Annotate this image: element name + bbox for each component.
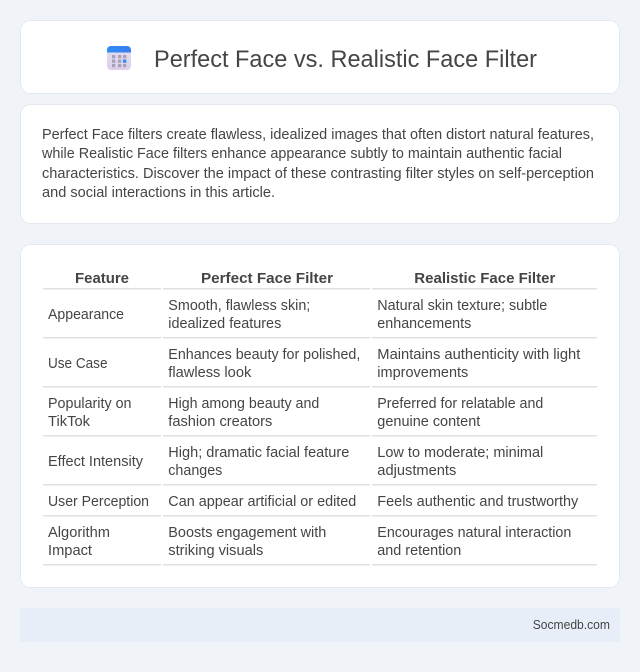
icon: calendar	[107, 46, 131, 70]
table row: algorithm impact: Boosts engagement with	[168, 525, 326, 541]
table header row: Feature	[75, 270, 129, 287]
title: Perfect Face vs. Realistic Face Filter	[154, 46, 537, 73]
text block: introduction paragraph: and social interactions in this article.	[42, 185, 275, 201]
table row: use case: flawless look	[168, 365, 252, 381]
table row: effect intensity: Low to moderate; minimal	[377, 445, 543, 461]
table header row: Realistic Face Filter	[414, 270, 555, 287]
table row: popularity on tiktok: Preferred for relatable and	[377, 396, 543, 412]
table row: algorithm impact: and retention	[377, 543, 461, 559]
table row: user perception: User Perception	[48, 494, 149, 510]
table header row	[75, 270, 555, 287]
table row: algorithm impact: striking visuals	[168, 543, 263, 559]
table row: effect intensity: adjustments	[377, 463, 456, 479]
table header row: Perfect Face Filter	[201, 270, 333, 287]
table row: effect intensity: changes	[168, 463, 222, 479]
table row: use case: Use Case	[48, 356, 108, 372]
table row: use case: Enhances beauty for polished,	[168, 347, 360, 363]
panel: introduction	[20, 104, 620, 224]
table row: use case	[48, 347, 580, 381]
text block: introduction paragraph: while Realistic Face filters enhance appearance subtly to maintain authentic facial	[41, 146, 562, 162]
panel: title card	[20, 20, 620, 94]
table row: use case: Maintains authenticity with light	[377, 347, 580, 363]
table row: algorithm impact: Impact	[48, 543, 92, 559]
table row: effect intensity: High; dramatic facial feature	[168, 445, 349, 461]
table row: appearance: enhancements	[377, 316, 471, 332]
table row: popularity on tiktok	[48, 396, 543, 430]
table row: user perception: Feels authentic and trustworthy	[377, 494, 579, 510]
table row: user perception: Can appear artificial or edited	[168, 494, 356, 510]
table row: appearance: Appearance	[48, 307, 124, 323]
table row: effect intensity	[48, 445, 543, 479]
table row: use case: improvements	[377, 365, 468, 381]
footer	[20, 608, 620, 642]
table row: algorithm impact: Algorithm	[48, 525, 110, 541]
table row: algorithm impact: Encourages natural interaction	[377, 525, 571, 541]
table row: algorithm impact	[48, 525, 571, 559]
table row: popularity on tiktok: High among beauty and	[168, 396, 319, 412]
table row: popularity on tiktok: fashion creators	[168, 414, 272, 430]
text block: introduction paragraph: characteristics. Discover the impact of these contrasting filter styles on self-perception	[42, 166, 594, 182]
footer source text: Socmedb.com	[533, 617, 610, 632]
text block: introduction paragraph	[41, 127, 594, 201]
table row: appearance: Natural skin texture; subtle	[377, 298, 547, 314]
text block: introduction paragraph: Perfect Face filters create flawless, idealized images that often distort natural features,	[42, 127, 594, 143]
table row: user perception	[48, 494, 579, 510]
table row: appearance: idealized features	[168, 316, 281, 332]
table row: appearance: Smooth, flawless skin;	[168, 298, 310, 314]
table row: popularity on tiktok: Popularity on	[48, 396, 132, 412]
panel: comparison table	[20, 244, 620, 588]
table row: appearance	[48, 298, 547, 332]
table row: effect intensity: Effect Intensity	[48, 454, 144, 470]
table row: popularity on tiktok: TikTok	[48, 414, 91, 430]
table row: popularity on tiktok: genuine content	[377, 414, 480, 430]
